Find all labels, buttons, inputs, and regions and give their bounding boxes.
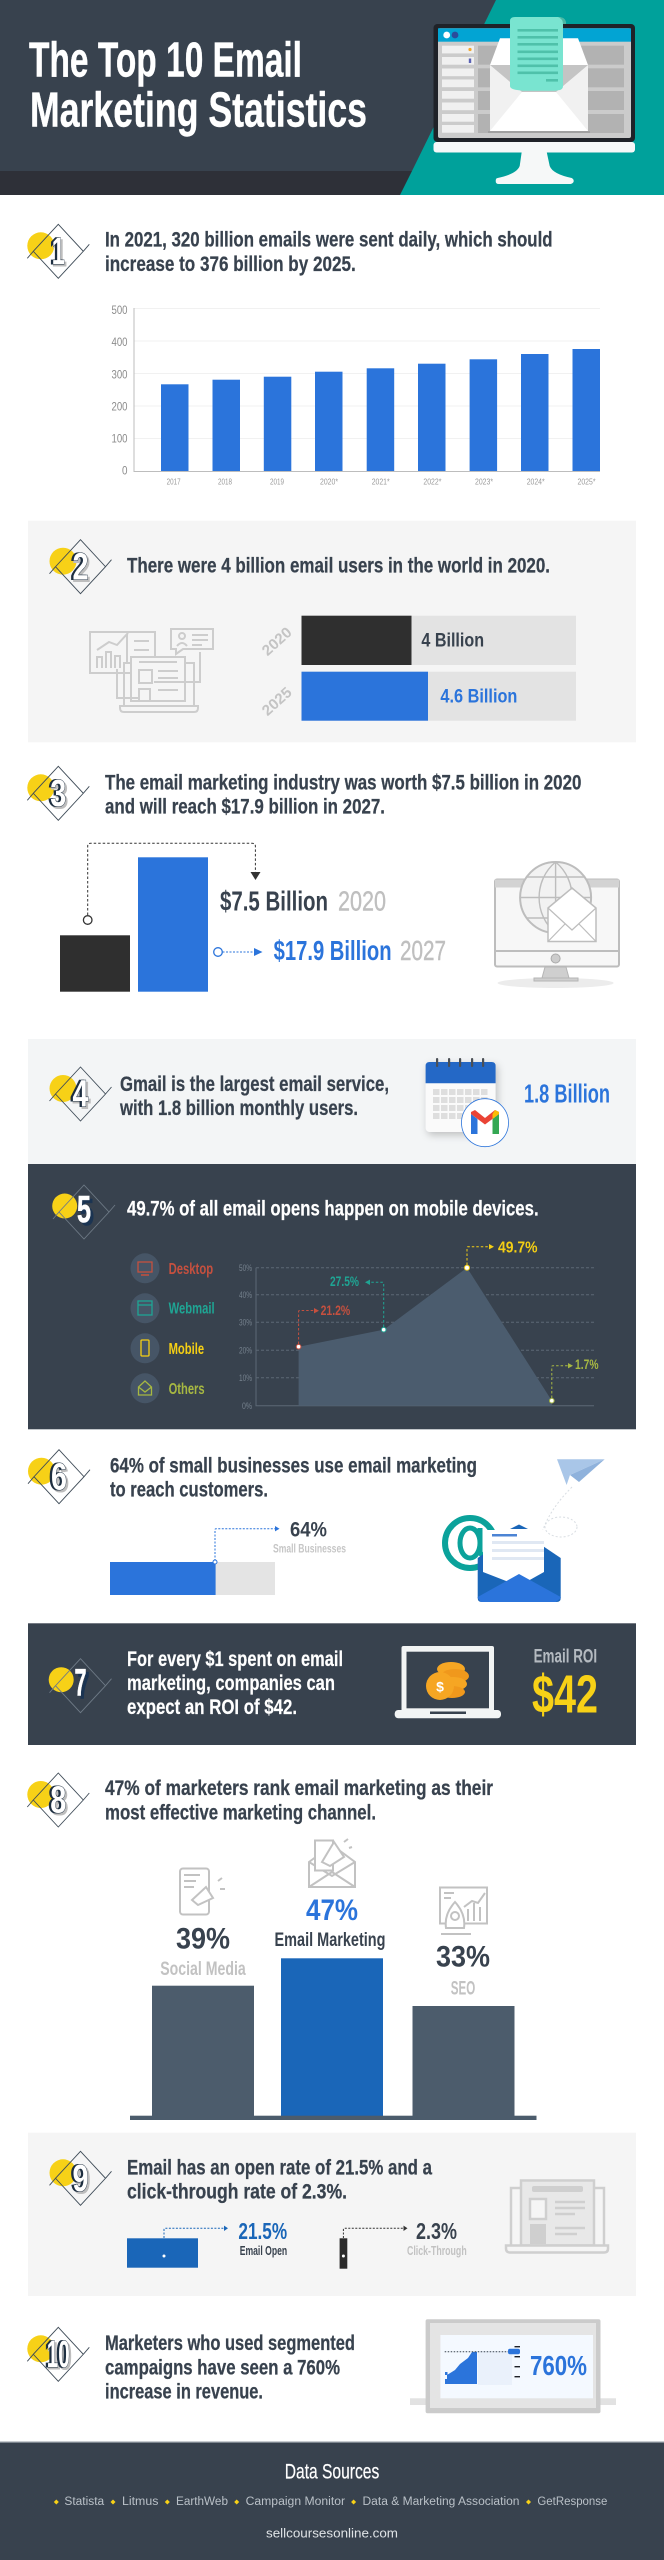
icon: envelope with megaphone xyxy=(309,1839,355,1887)
bar chart: emails per day 2017-2025: 2017 xyxy=(167,476,181,486)
bar chart: emails per day 2017-2025: 200 xyxy=(112,400,128,414)
callout: 27.5% webmail xyxy=(330,1273,386,1332)
legend: device types: Desktop xyxy=(169,1261,213,1278)
legend: device types xyxy=(130,1253,215,1403)
bar chart: emails per day 2017-2025: 2022* xyxy=(423,476,442,486)
callout: 27.5% webmail: 27.5% xyxy=(330,1273,359,1289)
heading 10 xyxy=(105,2331,355,2403)
bar chart: marketing channels: SEO xyxy=(451,1978,475,1999)
area chart: email opens by device: 0% xyxy=(242,1401,252,1412)
header banner xyxy=(0,0,664,195)
callout: 49.7% mobile: 49.7% xyxy=(498,1239,538,1256)
website: sellcoursesonline.com xyxy=(266,2525,398,2540)
heading 5: 49.7% of all email opens happen on mobile devices. xyxy=(127,1197,539,1221)
bar: email open 21.5%: 21.5% xyxy=(238,2218,287,2244)
title: The Top 10 Email xyxy=(29,34,302,88)
section 1: emails sent daily xyxy=(27,224,600,486)
badge 5: 5 xyxy=(77,1189,91,1231)
bars and callouts: market value: 2020 xyxy=(338,886,386,917)
badge 1: 1 xyxy=(52,231,65,273)
badge 7 xyxy=(49,1659,112,1713)
bar chart: marketing channels: 33% xyxy=(436,1941,490,1974)
bar chart: emails per day 2017-2025: 500 xyxy=(112,303,128,317)
badge 1 xyxy=(27,224,89,278)
callout: 21.2% desktop xyxy=(296,1302,351,1349)
bar chart: emails per day 2017-2025: 400 xyxy=(112,335,128,349)
panel: section 4 Gmail xyxy=(28,1039,636,1164)
source list: Statista xyxy=(64,2496,105,2508)
heading 6: 64% of small businesses use email marketing xyxy=(110,1453,477,1477)
progress bar: 64%: Small Businesses xyxy=(273,1541,346,1555)
badge 8 xyxy=(27,1773,89,1827)
bar chart: emails per day 2017-2025: 300 xyxy=(112,367,128,381)
heading 6: to reach customers. xyxy=(110,1478,268,1502)
heading 9 xyxy=(127,2155,433,2203)
stat: 1.8 Billion: 1.8 Billion xyxy=(524,1080,610,1108)
icon: newsletter laptop xyxy=(506,2180,608,2252)
title xyxy=(29,34,367,138)
heading 10: increase in revenue. xyxy=(105,2379,263,2403)
badge 3 xyxy=(27,766,89,820)
heading 8 xyxy=(105,1776,494,1824)
bar chart: emails per day 2017-2025: 2019 xyxy=(270,476,284,486)
callout: 21.2% desktop: 21.2% xyxy=(321,1302,351,1318)
heading 10: Marketers who used segmented xyxy=(105,2331,355,2355)
heading 7: For every $1 spent on email xyxy=(127,1647,343,1671)
heading 6 xyxy=(110,1453,477,1502)
heading 3: and will reach $17.9 billion in 2027. xyxy=(105,794,385,818)
source list: Litmus xyxy=(122,2496,159,2508)
callout: 49.7% mobile xyxy=(464,1239,538,1270)
stat: Email ROI $42 xyxy=(532,1647,598,1725)
source list xyxy=(54,2496,607,2508)
footer: data sources xyxy=(0,2442,664,2560)
panel: section 9 open and click rates xyxy=(28,2133,636,2296)
section 8: effective channel xyxy=(27,1773,537,2120)
icon: desktop monitor with email xyxy=(434,17,635,184)
badge 10: 10 xyxy=(47,2334,70,2376)
section 3: industry worth xyxy=(27,766,619,992)
bar chart: emails per day 2017-2025: 100 xyxy=(112,432,128,446)
heading 7: expect an ROI of $42. xyxy=(127,1695,297,1719)
bar: click-through 2.3%: Click-Through xyxy=(407,2243,467,2258)
icon: phone with megaphone xyxy=(180,1868,225,1914)
area chart: email opens by device: 20% xyxy=(239,1346,252,1356)
badge 2 xyxy=(50,540,112,594)
legend: device types: Webmail xyxy=(169,1300,215,1317)
heading 4: Gmail is the largest email service, xyxy=(120,1072,389,1096)
bar comparison: users 2020 vs 2025: 2025 xyxy=(259,684,295,719)
source list: EarthWeb xyxy=(176,2496,228,2508)
badge 2: 2 xyxy=(72,546,88,588)
bar chart: emails per day 2017-2025: 2020* xyxy=(320,476,339,486)
badge 10 xyxy=(27,2327,89,2381)
heading 9: Email has an open rate of 21.5% and a xyxy=(127,2155,433,2179)
source list: Data & Marketing Association xyxy=(362,2496,520,2508)
bar chart: marketing channels: Social Media xyxy=(160,1959,246,1980)
heading 1: In 2021, 320 billion emails were sent daily, which should xyxy=(105,228,553,252)
bar comparison: users 2020 vs 2025: 4 Billion xyxy=(421,630,484,652)
bar chart: emails per day 2017-2025: 2025* xyxy=(578,476,596,486)
icon: calendar with Gmail logo xyxy=(426,1058,508,1147)
stat: Email ROI $42: $42 xyxy=(532,1665,598,1725)
bar: email open 21.5%: Email Open xyxy=(240,2243,287,2258)
title: Marketing Statistics xyxy=(30,84,367,138)
progress bar: 64% xyxy=(110,1518,346,1595)
source list: Campaign Monitor xyxy=(246,2496,345,2508)
bar chart: marketing channels: Email Marketing xyxy=(274,1930,386,1951)
area chart: email opens by device: 10% xyxy=(239,1373,252,1384)
heading 1: increase to 376 billion by 2025. xyxy=(105,252,356,276)
heading 4 xyxy=(119,1072,389,1120)
bar comparison: users 2020 vs 2025: 2020 xyxy=(259,624,295,659)
panel: section 5 mobile opens xyxy=(28,1164,636,1429)
bars and callouts: market value: 2027 xyxy=(400,935,446,966)
bar chart: marketing channels: 47% xyxy=(306,1894,358,1927)
bars and callouts: market value: $17.9 Billion xyxy=(274,935,392,966)
badge 8: 8 xyxy=(50,1780,66,1822)
footer heading: Data Sources xyxy=(285,2460,379,2483)
bar chart: emails per day 2017-2025: 2023* xyxy=(475,476,494,486)
callout: 1.7% others: 1.7% xyxy=(575,1356,599,1372)
icon: laptop with revenue chart xyxy=(410,2319,616,2413)
bars and callouts: market value xyxy=(60,843,446,992)
panel: section 7 ROI xyxy=(28,1623,636,1745)
heading 10: campaigns have seen a 760% xyxy=(105,2355,340,2379)
heading 2: There were 4 billion email users in the world in 2020. xyxy=(127,553,550,577)
section 10: segmented campaigns xyxy=(27,2319,616,2413)
heading 8: 47% of marketers rank email marketing as their xyxy=(105,1776,494,1800)
heading 9: click-through rate of 2.3%. xyxy=(127,2179,347,2203)
icon: rocket and chart xyxy=(440,1888,487,1934)
source list: GetResponse xyxy=(537,2496,607,2508)
heading 1 xyxy=(105,228,553,276)
badge 4: 4 xyxy=(72,1074,88,1116)
bar chart: emails per day 2017-2025 xyxy=(112,303,600,486)
badge 3: 3 xyxy=(50,773,66,815)
bar comparison: users 2020 vs 2025 xyxy=(259,616,576,721)
badge 6 xyxy=(28,1450,90,1504)
icon: monitor with globe and envelope xyxy=(495,862,619,988)
icon: laptop with coins xyxy=(395,1646,501,1718)
icon: email with at sign and paper plane xyxy=(445,1459,605,1602)
icon: laptop with coins: $ xyxy=(436,1678,444,1694)
legend: device types: Others xyxy=(169,1381,205,1398)
callout: 1.7% others xyxy=(550,1356,599,1403)
bar chart: emails per day 2017-2025: 2021* xyxy=(372,476,390,486)
badge 9: 9 xyxy=(72,2158,88,2200)
heading 8: most effective marketing channel. xyxy=(105,1800,376,1824)
area chart: email opens by device: 50% xyxy=(239,1263,252,1274)
icon: analytics laptop xyxy=(90,629,213,712)
bar chart: marketing channels: 39% xyxy=(176,1922,230,1955)
badge 6: 6 xyxy=(51,1456,67,1498)
bars and callouts: market value: $7.5 Billion xyxy=(220,886,328,917)
badge 4 xyxy=(50,1067,112,1121)
bar chart: marketing channels xyxy=(130,1894,536,2120)
area chart: email opens by device: 40% xyxy=(239,1290,252,1301)
stat: Email ROI $42: Email ROI xyxy=(534,1647,597,1668)
bar chart: emails per day 2017-2025: 2018 xyxy=(218,476,232,486)
heading 3 xyxy=(105,770,581,818)
bar chart: emails per day 2017-2025: 0 xyxy=(122,463,128,477)
bar comparison: users 2020 vs 2025: 4.6 Billion xyxy=(440,685,517,707)
badge 7: 7 xyxy=(74,1663,86,1705)
area chart: email opens by device: 30% xyxy=(239,1318,252,1328)
badge 5 xyxy=(52,1185,115,1239)
heading 4: with 1.8 billion monthly users. xyxy=(119,1096,358,1120)
panel: section 2 email users xyxy=(28,521,636,742)
legend: device types: Mobile xyxy=(169,1341,204,1358)
bar: click-through 2.3%: 2.3% xyxy=(416,2218,457,2244)
bar chart: emails per day 2017-2025: 2024* xyxy=(527,476,545,486)
bar: email open 21.5% xyxy=(127,2218,287,2268)
heading 7: marketing, companies can xyxy=(127,1671,335,1695)
area chart: email opens by device xyxy=(239,1239,599,1412)
icon: laptop with revenue chart: 760% xyxy=(530,2350,587,2381)
bar: click-through 2.3% xyxy=(340,2218,467,2269)
badge 9 xyxy=(50,2151,112,2205)
heading 7 xyxy=(127,1647,343,1719)
section 6: small businesses xyxy=(28,1450,605,1602)
progress bar: 64%: 64% xyxy=(290,1518,327,1542)
